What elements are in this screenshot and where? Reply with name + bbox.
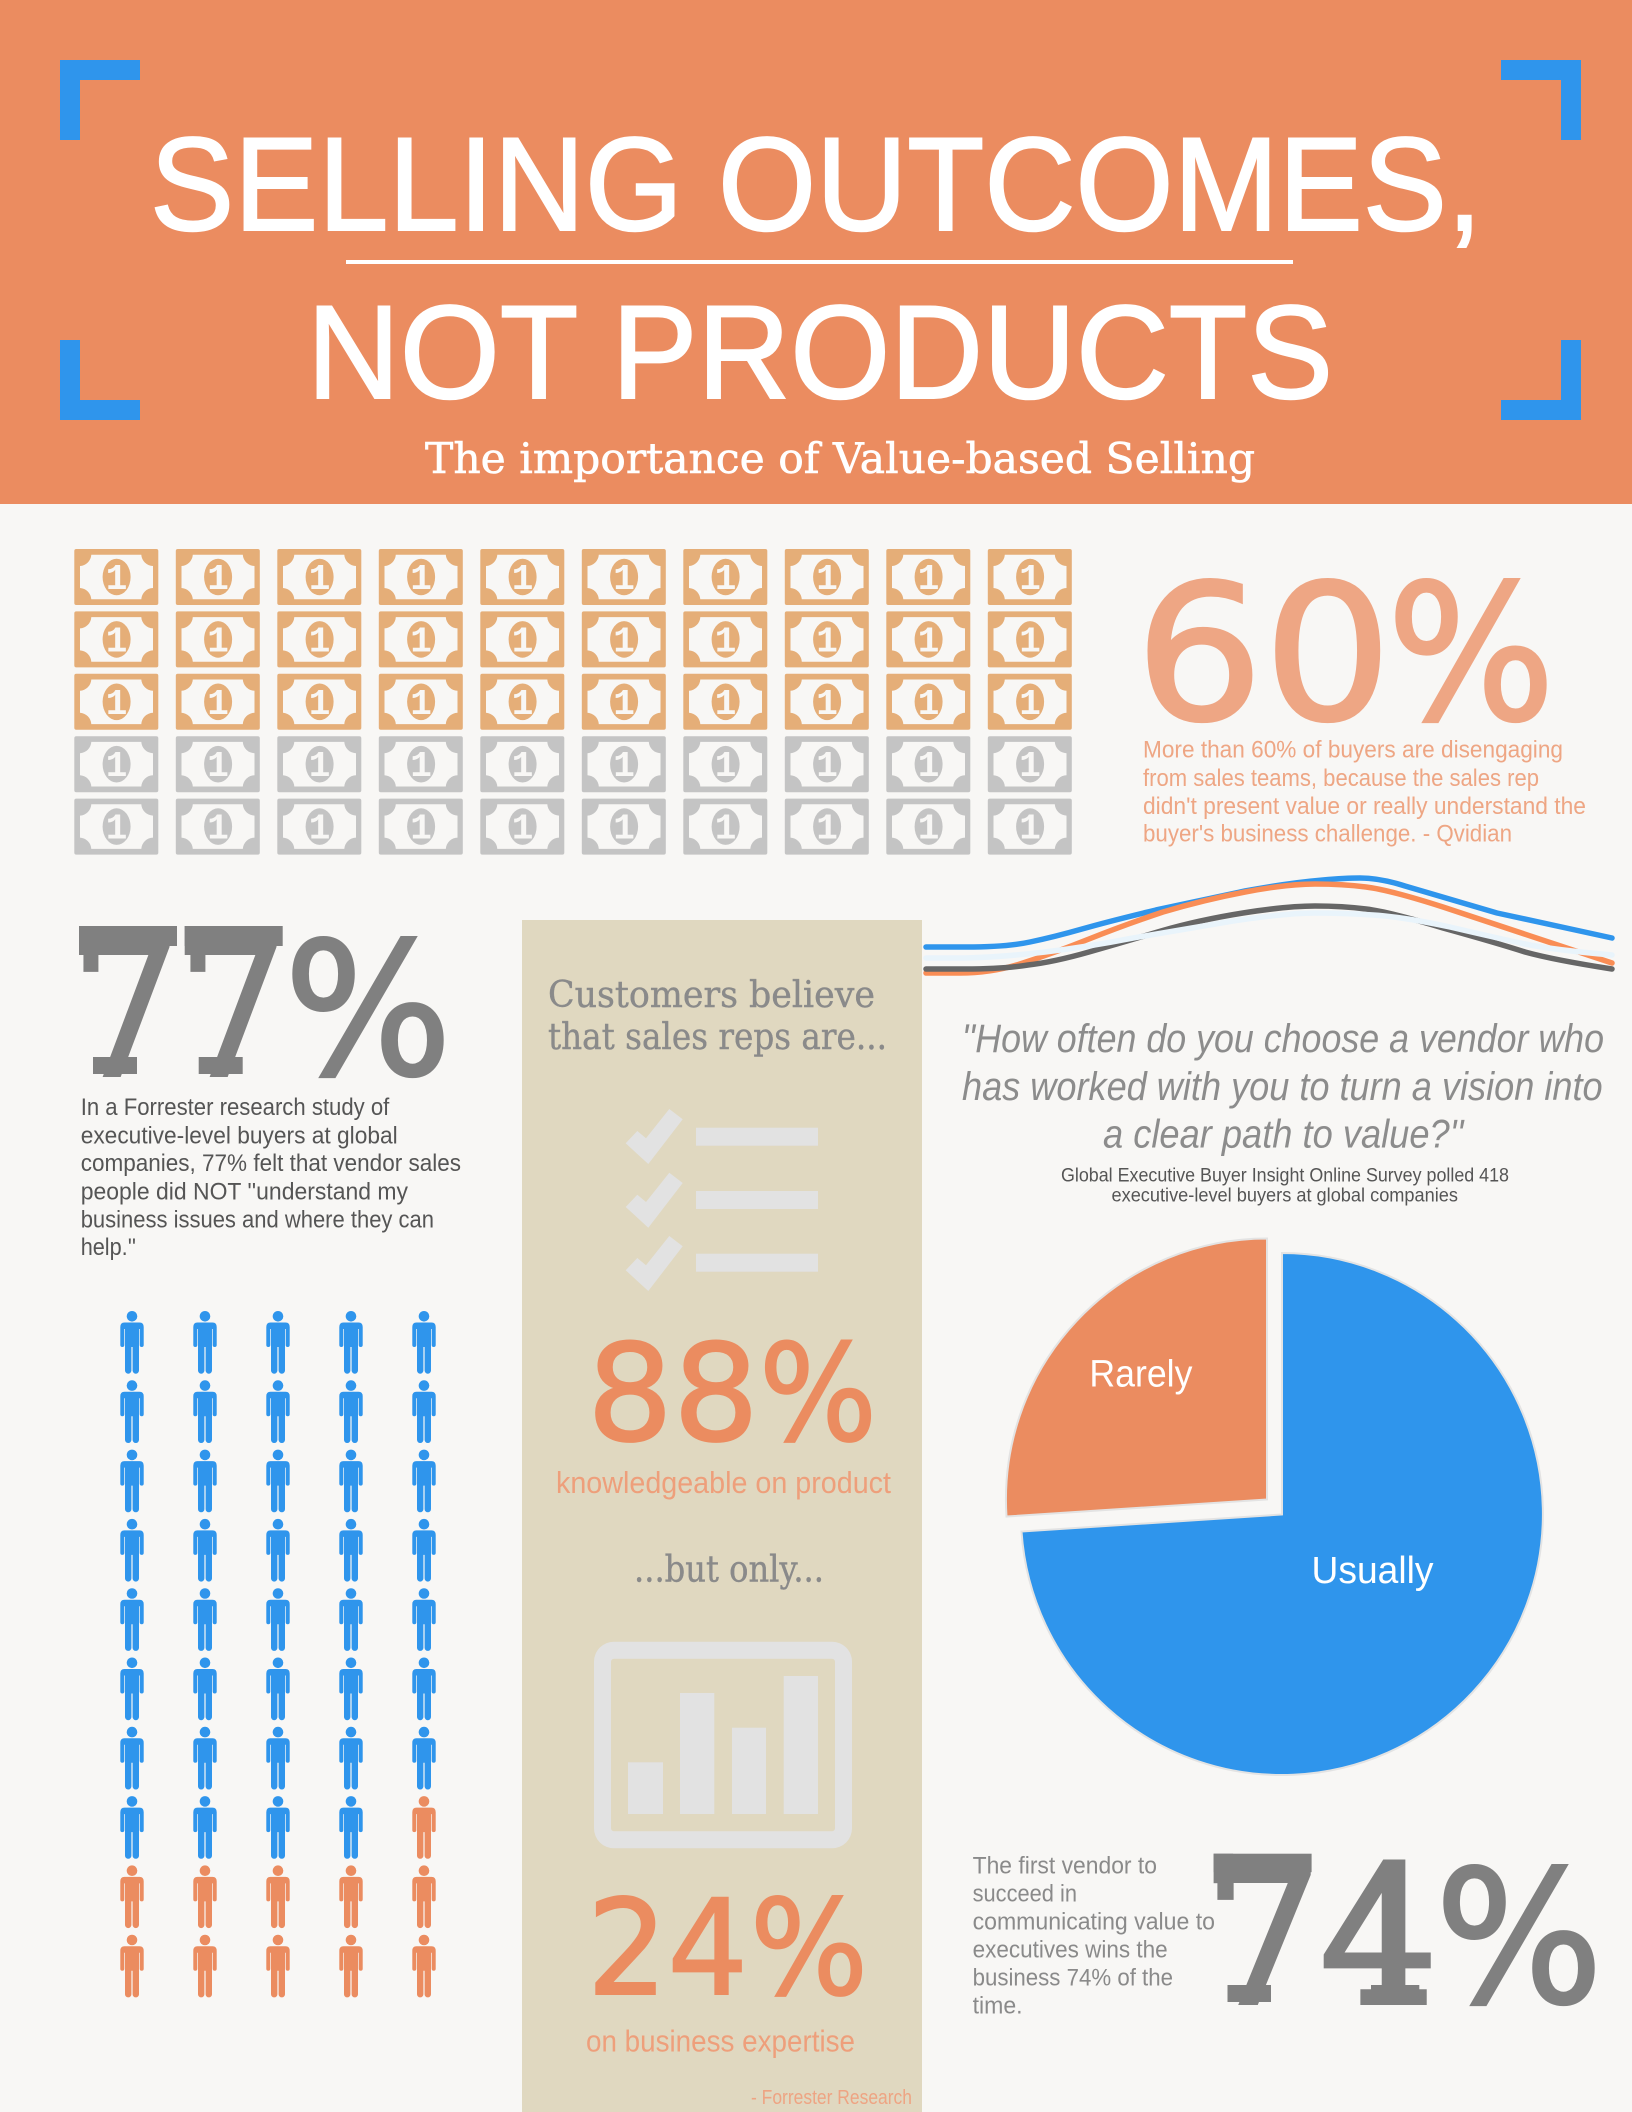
title line 2: NOT PRODUCTS <box>307 279 1333 427</box>
money pictogram: 30 of 50 bills coloured: 1 <box>106 809 127 850</box>
corner bracket: top left <box>60 60 140 140</box>
subtitle: The importance of Value-based Selling <box>425 434 1255 483</box>
corner bracket: bottom right <box>1501 340 1581 420</box>
text: 74% description: executives wins the <box>973 1937 1168 1964</box>
corner bracket: top right <box>1501 60 1581 140</box>
money pictogram: 30 of 50 bills coloured: 1 <box>309 684 330 725</box>
money pictogram: 30 of 50 bills coloured: 1 <box>715 746 736 787</box>
panel heading: that sales reps are... <box>548 1017 887 1058</box>
stat: 60%: % <box>1387 545 1555 764</box>
text: 74% description: communicating value to <box>973 1909 1215 1936</box>
quote <box>962 1017 1604 1157</box>
money pictogram: 30 of 50 bills coloured: 1 <box>410 684 432 725</box>
money pictogram: 30 of 50 bills coloured: 1 <box>1019 746 1041 787</box>
money pictogram: 30 of 50 bills coloured: 1 <box>613 684 635 725</box>
stat: 77% <box>72 900 452 1119</box>
text: 60% description: from sales teams, because the sales rep <box>1143 765 1539 792</box>
text: 60% description <box>1143 737 1586 848</box>
survey note: executive-level buyers at global companies <box>1112 1186 1458 1207</box>
money pictogram: 30 of 50 bills coloured: 1 <box>1019 559 1041 600</box>
text: 74% description: business 74% of the <box>973 1965 1173 1992</box>
text: 77% description: executive-level buyers at global <box>81 1122 398 1149</box>
text: 77% description: people did NOT ''understand my <box>81 1178 408 1205</box>
stat: 74% <box>1205 1828 1603 2047</box>
money pictogram: 30 of 50 bills coloured: 1 <box>816 621 838 662</box>
text: 74% description: succeed in <box>973 1881 1077 1908</box>
stat: 24%: 24 <box>587 1872 748 2026</box>
text: 77% description: companies, 77% felt that vendor sales <box>81 1150 461 1177</box>
corner bracket: bottom left <box>60 340 140 420</box>
money pictogram: 30 of 50 bills coloured: 1 <box>106 684 127 725</box>
money pictogram: 30 of 50 bills coloured <box>74 549 1072 855</box>
text: 77% description: help.'' <box>81 1234 136 1261</box>
money pictogram: 30 of 50 bills coloured: 1 <box>715 559 736 600</box>
text: 74% description <box>973 1852 1215 2020</box>
money pictogram: 30 of 50 bills coloured: 1 <box>512 684 533 725</box>
money pictogram: 30 of 50 bills coloured: 1 <box>512 746 533 787</box>
pie label: Rarely: Rarely <box>1089 1354 1192 1396</box>
money pictogram: 30 of 50 bills coloured: 1 <box>410 809 432 850</box>
money pictogram: 30 of 50 bills coloured: 1 <box>1019 809 1041 850</box>
source: Forrester Research: - Forrester Research <box>751 2087 912 2109</box>
money pictogram: 30 of 50 bills coloured: 1 <box>613 621 635 662</box>
text: but only: ...but only... <box>634 1550 824 1591</box>
pie chart <box>1006 1238 1543 1775</box>
title divider <box>346 260 1293 264</box>
text: 60% description: buyer's business challenge. - Qvidian <box>1143 821 1512 848</box>
stat: 24%: % <box>750 1872 868 2026</box>
money pictogram: 30 of 50 bills coloured: 1 <box>410 621 432 662</box>
money pictogram: 30 of 50 bills coloured: 1 <box>918 559 939 600</box>
pie label: Usually: Usually <box>1312 1550 1434 1592</box>
survey note <box>1061 1166 1509 1207</box>
survey note: Global Executive Buyer Insight Online Survey polled 418 <box>1061 1166 1509 1187</box>
money pictogram: 30 of 50 bills coloured: 1 <box>106 746 127 787</box>
slice: Rarely <box>1006 1238 1267 1516</box>
money pictogram: 30 of 50 bills coloured: 1 <box>410 746 432 787</box>
money pictogram: 30 of 50 bills coloured: 1 <box>309 809 330 850</box>
money pictogram: 30 of 50 bills coloured: 1 <box>309 559 330 600</box>
money pictogram: 30 of 50 bills coloured: 1 <box>918 684 939 725</box>
money pictogram: 30 of 50 bills coloured: 1 <box>512 621 533 662</box>
money pictogram: 30 of 50 bills coloured: 1 <box>106 621 127 662</box>
stat: 77%: 77 <box>72 900 286 1119</box>
money pictogram: 30 of 50 bills coloured: 1 <box>410 559 432 600</box>
money pictogram: 30 of 50 bills coloured: 1 <box>816 684 838 725</box>
stat: 74%: 74 <box>1205 1828 1437 2047</box>
money pictogram: 30 of 50 bills coloured: 1 <box>106 559 127 600</box>
panel heading <box>548 975 887 1058</box>
money pictogram: 30 of 50 bills coloured: 1 <box>918 621 939 662</box>
money pictogram: 30 of 50 bills coloured: 1 <box>1019 684 1041 725</box>
icon: checklist <box>626 1109 818 1291</box>
text: 77% description <box>81 1094 461 1261</box>
header banner <box>0 0 1632 504</box>
text: 74% description: time. <box>973 1993 1023 2020</box>
label: knowledgeable on product: knowledgeable on product <box>556 1465 891 1500</box>
money pictogram: 30 of 50 bills coloured: 1 <box>816 559 838 600</box>
money pictogram: 30 of 50 bills coloured: 1 <box>715 684 736 725</box>
icon: bar chart <box>594 1642 852 1848</box>
label: on business expertise: on business expertise <box>586 2024 855 2059</box>
text: 77% description: business issues and where they can <box>81 1206 434 1233</box>
money pictogram: 30 of 50 bills coloured: 1 <box>613 746 635 787</box>
money pictogram: 30 of 50 bills coloured: 1 <box>918 746 939 787</box>
money pictogram: 30 of 50 bills coloured: 1 <box>512 559 533 600</box>
stat: 60%: 60 <box>1135 545 1392 764</box>
money pictogram: 30 of 50 bills coloured: 1 <box>207 621 229 662</box>
money pictogram: 30 of 50 bills coloured: 1 <box>207 684 229 725</box>
money pictogram: 30 of 50 bills coloured: 1 <box>613 559 635 600</box>
title line 1: SELLING OUTCOMES, <box>150 111 1482 259</box>
money pictogram: 30 of 50 bills coloured: 1 <box>715 621 736 662</box>
text: 60% description: didn't present value or really understand the <box>1143 793 1586 820</box>
money pictogram: 30 of 50 bills coloured: 1 <box>816 809 838 850</box>
money pictogram: 30 of 50 bills coloured: 1 <box>613 809 635 850</box>
panel heading: Customers believe <box>548 975 875 1016</box>
money pictogram: 30 of 50 bills coloured: 1 <box>512 809 533 850</box>
money pictogram: 30 of 50 bills coloured: 1 <box>309 621 330 662</box>
money pictogram: 30 of 50 bills coloured: 1 <box>918 809 939 850</box>
quote: a clear path to value?'' <box>1103 1113 1465 1157</box>
money pictogram: 30 of 50 bills coloured: 1 <box>207 746 229 787</box>
stat: 88%: % <box>759 1316 877 1472</box>
text: 60% description: More than 60% of buyers are disengaging <box>1143 737 1563 764</box>
money pictogram: 30 of 50 bills coloured: 1 <box>1019 621 1041 662</box>
text: 74% description: The first vendor to <box>973 1852 1157 1879</box>
money pictogram: 30 of 50 bills coloured: 1 <box>816 746 838 787</box>
money pictogram: 30 of 50 bills coloured: 1 <box>309 746 330 787</box>
money pictogram: 30 of 50 bills coloured: 1 <box>207 809 229 850</box>
wavy decorative lines <box>926 878 1612 973</box>
panel: customers believe <box>522 920 922 2112</box>
text: 77% description: In a Forrester research study of <box>81 1094 390 1121</box>
stat: 74%: % <box>1435 1832 1603 2046</box>
stat: 77%: % <box>284 904 452 1118</box>
stat: 88%: 88 <box>587 1316 759 1472</box>
money pictogram: 30 of 50 bills coloured: 1 <box>715 809 736 850</box>
slice: Usually <box>1022 1253 1543 1775</box>
money pictogram: 30 of 50 bills coloured: 1 <box>207 559 229 600</box>
people pictogram: 39 blue, 11 orange <box>120 1311 436 1997</box>
